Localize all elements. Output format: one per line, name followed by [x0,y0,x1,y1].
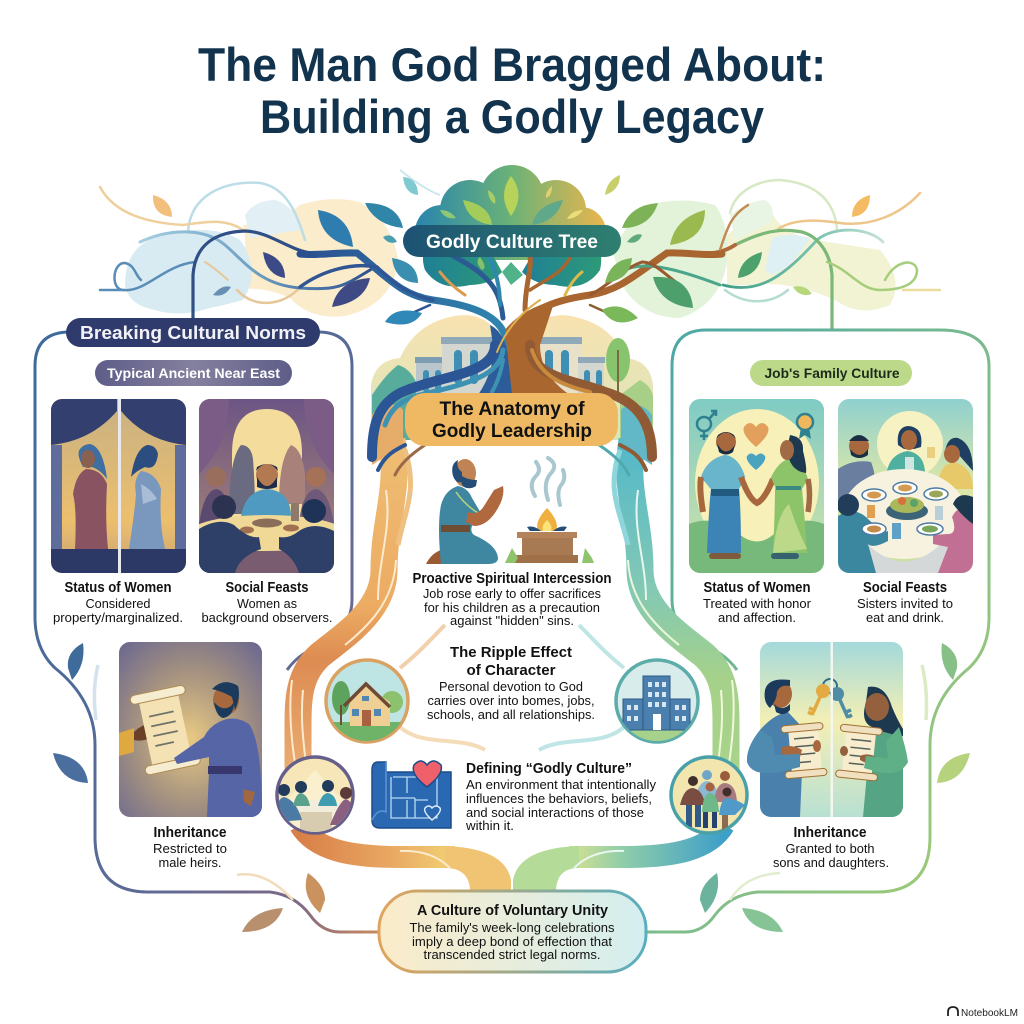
caption: inheritance (job): Inheritance [794,825,866,841]
caption: social feasts (ancient) [202,580,332,625]
caption: social feasts (ancient): Social Feasts [226,580,308,596]
text: ripple effect of character: of Character [466,662,556,679]
caption: social feasts (ancient): background observers. [202,610,332,625]
caption: status of women (ancient) [53,580,183,625]
text: proactive spiritual intercession: for his children as a precaution [424,600,600,615]
callout: culture of voluntary unity [379,891,646,972]
icon: family group circle [671,757,747,833]
vine leaves around the panels [53,195,970,932]
icon: praying man at altar [426,458,594,564]
text: ripple effect of character: carries over into bomes, jobs, [428,693,594,708]
roots flowing down the centre panel [290,440,734,892]
text: defining godly culture: An environment that intentionally [466,777,656,792]
caption: status of women (ancient): Considered [86,596,150,611]
icon: community table circle [276,757,356,834]
callout: culture of voluntary unity: The family's week-long celebrations [410,920,615,935]
caption: inheritance (ancient) [153,825,227,870]
pill: anatomy of godly leadership [405,393,618,446]
text: ripple effect of character: schools, and all relationships. [427,707,595,722]
decorative vines from tree to right panel [665,180,940,330]
decorative vines from tree to left panel [100,183,375,318]
caption: social feasts (job): Sisters invited to [857,596,953,611]
text: defining godly culture: influences the behaviors, beliefs, [466,791,652,806]
image: inheritance scroll to male heir [119,642,262,817]
pill: godly culture tree [403,225,621,257]
caption: status of women (ancient): Status of Women [64,580,172,596]
tree trunk, branches and upper roots [300,253,722,475]
tree leaves [318,175,705,325]
caption: status of women (job) [703,580,812,625]
pill: job's family culture [750,360,912,386]
caption: inheritance (ancient): Restricted to [153,841,227,856]
image: inheritance to sons and daughters [747,642,908,817]
pill: godly culture tree: Godly Culture Tree [426,232,598,253]
text: defining godly culture [465,760,656,833]
icon: blueprint with heart [372,761,451,828]
caption: inheritance (job): Granted to both [786,841,874,856]
image: women as background observers at feast [199,399,334,573]
text: ripple effect of character [427,644,595,722]
callout: culture of voluntary unity: transcended strict legal norms. [424,947,600,962]
image: sisters invited to eat and drink [837,399,973,573]
caption: social feasts (ancient): Women as [237,596,297,611]
text: defining godly culture: Defining “Godly Culture” [466,760,632,777]
text: proactive spiritual intercession: Job rose early to offer sacrifices [423,586,601,601]
caption: social feasts (job) [857,580,953,625]
pill: breaking cultural norms: Breaking Cultural Norms [80,323,306,343]
pill: breaking cultural norms [66,318,320,347]
caption: status of women (job): and affection. [718,610,796,625]
text: ripple effect of character: Personal devotion to God [439,679,583,694]
text: defining godly culture: and social interactions of those [466,805,644,820]
pill: anatomy of godly leadership: Godly Leadership [432,421,592,442]
title: The Man God Bragged About: [198,38,826,91]
title: Building a Godly Legacy [260,90,764,143]
pill: job's family culture: Job's Family Culture [764,365,900,381]
caption: status of women (ancient): property/marginalized. [53,610,183,625]
image: women marginalized behind curtain [51,399,186,573]
tree canopy [415,165,606,287]
caption: social feasts (job): Social Feasts [863,580,947,596]
text: ripple effect of character: The Ripple Effect [450,644,572,661]
caption: inheritance (ancient): male heirs. [158,855,222,870]
caption: status of women (job): Treated with honor [703,596,812,611]
pill: typical ancient near east: Typical Ancient Near East [107,365,280,381]
panel outline: breaking cultural norms [35,332,380,932]
notebooklm logo: NotebookLM [961,1007,1018,1019]
text: defining godly culture: within it. [465,818,514,833]
text: proactive spiritual intercession: Proactive Spiritual Intercession [412,571,612,587]
callout: culture of voluntary unity: A Culture of Voluntary Unity [417,902,609,919]
icon: office buildings circle [616,660,698,744]
text: proactive spiritual intercession: against "hidden" sins. [450,613,574,628]
title [198,38,826,143]
caption: social feasts (job): eat and drink. [866,610,944,625]
panel outline: job's family culture [645,330,989,932]
text: proactive spiritual intercession [412,571,612,628]
caption: inheritance (ancient): Inheritance [154,825,226,841]
pill: typical ancient near east [95,360,292,386]
building skyline behind roots [371,315,653,440]
callout: culture of voluntary unity: imply a deep bond of effection that [412,934,612,949]
caption: status of women (job): Status of Women [704,580,810,596]
icon: house circle [325,660,409,744]
image: man and woman holding hands with honor [689,399,824,573]
caption: inheritance (job): sons and daughters. [773,855,889,870]
caption: inheritance (job) [773,825,889,870]
background colour washes behind the branches [125,170,896,318]
pill: anatomy of godly leadership: The Anatomy of [440,399,585,420]
